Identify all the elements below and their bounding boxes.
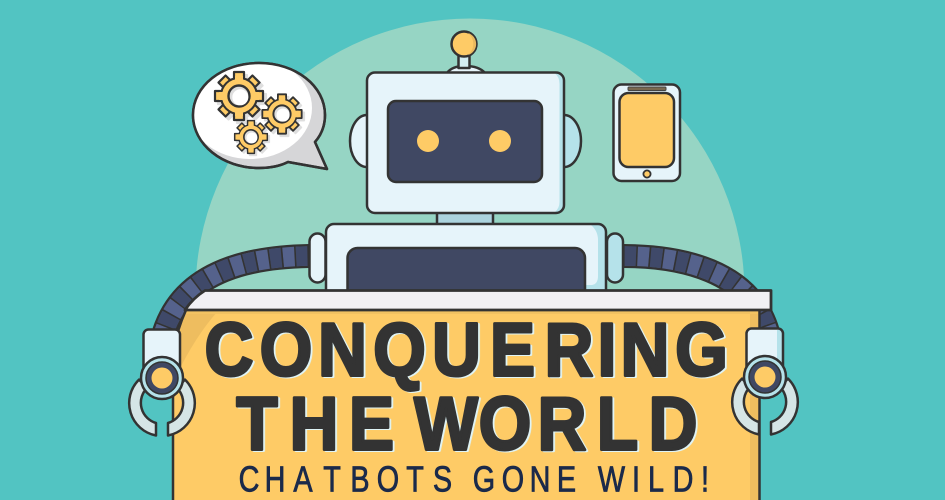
robot head [367,72,564,213]
subtitle: CHATBOTS GONE WILD! [239,458,709,499]
robot left eye [417,130,439,152]
title line 1: CONQUERING [205,308,728,392]
robot screen [388,101,542,182]
robot right eye [489,130,511,152]
right robot hand [732,328,798,434]
banner [173,290,771,500]
icon: tablet [614,84,680,181]
robot shoulders [310,234,623,282]
robot body [326,224,606,292]
left robot hand [129,330,195,436]
robot chest panel [348,248,585,292]
background circle [196,18,744,293]
robot antenna [447,32,485,73]
icon: speech bubble with gears [188,57,327,169]
robot ears [350,115,581,167]
right arm [623,256,768,332]
title line 2: THE WORLD [236,382,697,466]
banner top shelf [185,290,771,310]
left arm [164,256,309,332]
robot neck [437,212,493,225]
